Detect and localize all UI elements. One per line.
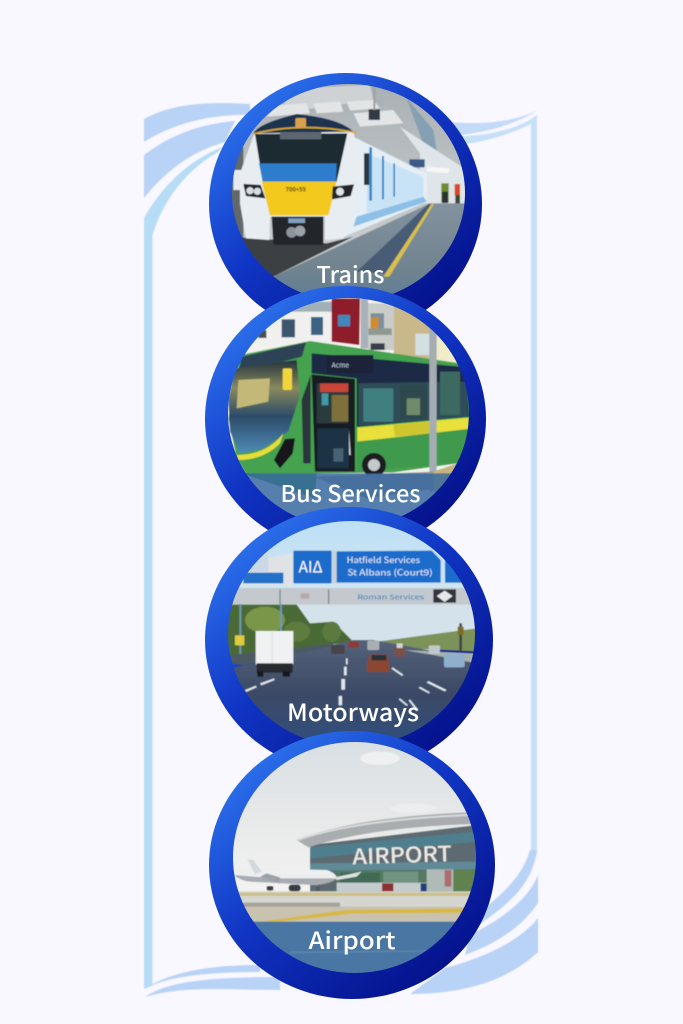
photo: motorway with gantry: Hatfield Services	[347, 554, 420, 566]
ribbon frame	[144, 103, 538, 997]
photo: green bus	[223, 295, 473, 522]
photo: motorway with gantry: St Albans (Court9)	[347, 567, 433, 579]
circle: motorways	[205, 507, 493, 773]
label: Bus Services: Bus Services	[280, 475, 420, 509]
ring: trains	[209, 73, 482, 335]
photo: motorway with gantry: Roman Services	[357, 591, 424, 601]
circle: trains	[209, 73, 482, 335]
photo: airport terminal	[230, 740, 480, 975]
ring: airport	[209, 731, 495, 999]
ring: bus services	[205, 286, 486, 552]
label: Trains: Trains	[316, 256, 384, 290]
photo: green bus: Acme	[332, 360, 349, 370]
label: Airport: Airport	[308, 921, 396, 956]
infographic canvas	[144, 73, 538, 999]
circle: bus services	[205, 286, 486, 552]
label: Motorways: Motorways	[287, 693, 419, 728]
photo: train at platform: 700+59	[286, 185, 306, 194]
photo: motorway with gantry	[223, 517, 480, 747]
circle: airport	[209, 731, 495, 999]
photo: airport terminal: AIRPORT	[352, 837, 452, 871]
ring: motorways	[205, 507, 493, 773]
photo: train at platform	[232, 84, 465, 294]
photo: motorway with gantry: AIΔ	[299, 556, 323, 578]
